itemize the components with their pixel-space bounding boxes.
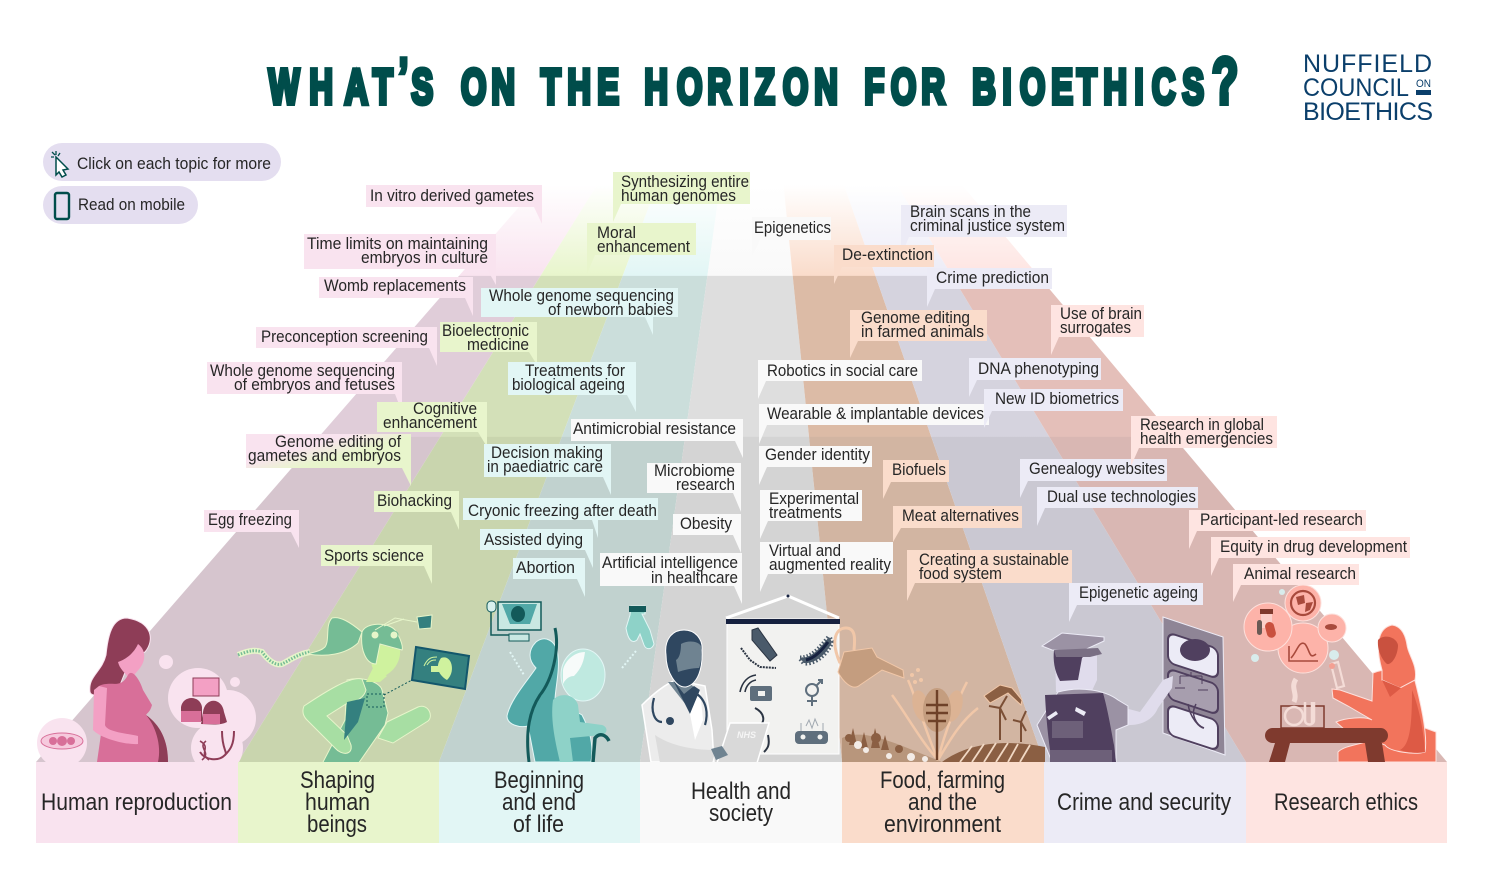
labels: food, farming and the environment: Biofuels — [892, 461, 946, 479]
bar: shaping human beings: Shaping — [300, 767, 375, 794]
labels: health and society: treatments — [769, 504, 842, 522]
bar: crime and security: Crime and security — [1057, 789, 1231, 816]
labels: research ethics: Research in global — [1140, 416, 1264, 434]
title: HORIZON — [644, 59, 838, 114]
labels: shaping human beings: Moral — [597, 224, 636, 242]
labels: crime and security: Brain scans in the — [910, 203, 1031, 221]
labels: shaping human beings: Bioelectronic — [442, 322, 529, 340]
labels: human reproduction: embryos in culture — [361, 249, 488, 267]
labels: shaping human beings: enhancement — [383, 414, 477, 432]
labels: shaping human beings: gametes and embryos — [248, 447, 401, 465]
labels: crime and security: criminal justice system — [910, 217, 1065, 235]
labels: beginning and end of life: Cryonic freezing after death — [468, 502, 657, 520]
panel: instructions: Click on each topic for more — [77, 154, 271, 173]
bar: food, farming and the environment: Food, farming — [880, 767, 1005, 794]
labels: human reproduction: Whole genome sequencing — [210, 362, 395, 380]
beams — [36, 185, 1447, 762]
bar: beginning and end of life: of life — [513, 811, 564, 838]
labels: health and society: Epigenetics — [754, 219, 831, 237]
labels: human reproduction — [204, 185, 542, 548]
bar: beginning and end of life: and end — [502, 789, 576, 816]
labels: research ethics: Use of brain — [1060, 305, 1142, 323]
title: THE — [541, 59, 619, 114]
labels: shaping human beings: human genomes — [621, 187, 736, 205]
labels: research ethics: Participant-led research — [1200, 511, 1363, 529]
labels: shaping human beings: medicine — [467, 336, 529, 354]
labels: crime and security — [901, 203, 1203, 622]
labels: beginning and end of life: Whole genome sequencing — [489, 287, 674, 305]
bar: research ethics: Research ethics — [1274, 789, 1418, 816]
labels: health and society: Gender identity — [765, 446, 871, 464]
labels: health and society: research — [676, 476, 735, 494]
title: FOR — [864, 59, 945, 114]
title: BIOETHICS — [972, 59, 1204, 114]
labels: crime and security: DNA phenotyping — [978, 360, 1099, 378]
labels: health and society: Artificial intelligence — [602, 554, 738, 572]
labels: human reproduction: Egg freezing — [208, 511, 292, 529]
bar: health and society: Health and — [691, 778, 791, 805]
logo: Nuffield Council on Bioethics — [1303, 50, 1433, 126]
bar: food, farming and the environment: environment — [884, 811, 1001, 838]
labels: food, farming and the environment: Meat alternatives — [902, 507, 1019, 525]
labels: beginning and end of life: Treatments for — [525, 362, 625, 380]
illustration: pregnant woman and bubbles — [37, 618, 256, 774]
labels: crime and security: Epigenetic ageing — [1079, 584, 1198, 602]
bar: research ethics — [1246, 762, 1447, 843]
illustration: police officer and screen — [1037, 617, 1225, 762]
bar: shaping human beings: beings — [307, 811, 367, 838]
labels: food, farming and the environment: Creating a sustainable — [919, 551, 1069, 569]
labels: shaping human beings: Synthesizing entire — [621, 173, 749, 191]
labels: research ethics: Animal research — [1244, 565, 1356, 583]
labels: shaping human beings — [246, 172, 750, 584]
labels: food, farming and the environment: De-extinction — [842, 246, 933, 264]
bar: human reproduction: Human reproduction — [41, 789, 232, 816]
labels: shaping human beings: enhancement — [597, 238, 690, 256]
labels: health and society: augmented reality — [769, 556, 892, 574]
bar: human reproduction — [36, 762, 238, 843]
title: WHAT’S — [269, 48, 433, 114]
bar: food, farming and the environment — [842, 762, 1044, 843]
illustration: doctor and poster: NHS — [737, 730, 756, 740]
labels: crime and security: New ID biometrics — [995, 390, 1119, 408]
bar: shaping human beings: human — [305, 789, 370, 816]
labels: health and society: Robotics in social care — [767, 362, 918, 380]
labels: shaping human beings: Cognitive — [413, 400, 477, 418]
labels: beginning and end of life: in paediatric care — [487, 458, 603, 476]
illustration: researcher and thought bubbles — [1244, 585, 1436, 762]
title: ? — [1212, 43, 1238, 118]
illustration: runner with DNA ponytail — [238, 615, 469, 764]
labels: human reproduction: Preconception screening — [261, 328, 428, 346]
labels: food, farming and the environment: Genome editing — [861, 309, 970, 327]
bar: beginning and end of life: Beginning — [494, 767, 584, 794]
bar: shaping human beings — [238, 762, 439, 843]
illustration: pregnant figure, elder, scan and pills — [487, 601, 654, 762]
labels: human reproduction: In vitro derived gametes — [370, 187, 534, 205]
labels: shaping human beings: Biohacking — [377, 492, 452, 510]
labels: health and society: Virtual and — [769, 542, 841, 560]
labels: health and society — [571, 217, 989, 604]
labels: health and society: in healthcare — [651, 569, 738, 587]
bar: beginning and end of life — [439, 762, 640, 843]
labels: food, farming and the environment — [834, 245, 1072, 601]
bar: health and society — [640, 762, 842, 843]
labels: shaping human beings: Genome editing of — [275, 433, 401, 451]
labels: research ethics: surrogates — [1060, 319, 1131, 337]
bar: crime and security — [1044, 762, 1246, 843]
labels: human reproduction: Womb replacements — [324, 277, 466, 295]
labels: beginning and end of life: Abortion — [516, 559, 575, 577]
labels: research ethics: Equity in drug development — [1220, 538, 1407, 556]
logo: Nuffield Council on Bioethics: BIOETHICS — [1303, 98, 1433, 126]
labels: food, farming and the environment: food system — [919, 565, 1002, 583]
labels: food, farming and the environment: in farmed animals — [861, 323, 984, 341]
labels: human reproduction: Time limits on maintaining — [307, 235, 488, 253]
bar: food, farming and the environment: and the — [908, 789, 977, 816]
bar: health and society: society — [709, 800, 773, 827]
labels: research ethics — [1051, 305, 1410, 602]
labels: beginning and end of life — [463, 287, 678, 597]
labels: crime and security: Crime prediction — [936, 269, 1049, 287]
logo: Nuffield Council on Bioethics: NUFFIELD — [1303, 50, 1432, 78]
illustration: doctor and poster — [642, 594, 840, 763]
labels: health and society: Wearable & implantable devices — [767, 405, 984, 423]
labels: crime and security: Dual use technologies — [1047, 488, 1196, 506]
labels: beginning and end of life: Assisted dying — [484, 531, 583, 549]
labels: health and society: Experimental — [769, 490, 859, 508]
illustration: food, farming and environment — [835, 628, 1045, 762]
labels: beginning and end of life: of newborn babies — [548, 301, 673, 319]
labels: research ethics: health emergencies — [1140, 430, 1273, 448]
title — [269, 43, 1238, 118]
labels: health and society: Antimicrobial resistance — [573, 420, 736, 438]
panel: instructions: Read on mobile — [78, 195, 185, 214]
labels: beginning and end of life: Decision making — [491, 444, 603, 462]
panel: instructions — [43, 143, 281, 224]
logo: Nuffield Council on Bioethics: ON — [1416, 78, 1431, 90]
title: ON — [461, 59, 515, 114]
labels: shaping human beings: Sports science — [324, 547, 424, 565]
labels: beginning and end of life: biological ageing — [512, 376, 625, 394]
labels: human reproduction: of embryos and fetuses — [234, 376, 395, 394]
labels: crime and security: Genealogy websites — [1029, 460, 1165, 478]
labels: health and society: Obesity — [680, 515, 733, 533]
labels: health and society: Microbiome — [654, 462, 735, 480]
logo: Nuffield Council on Bioethics: COUNCIL — [1303, 74, 1409, 102]
